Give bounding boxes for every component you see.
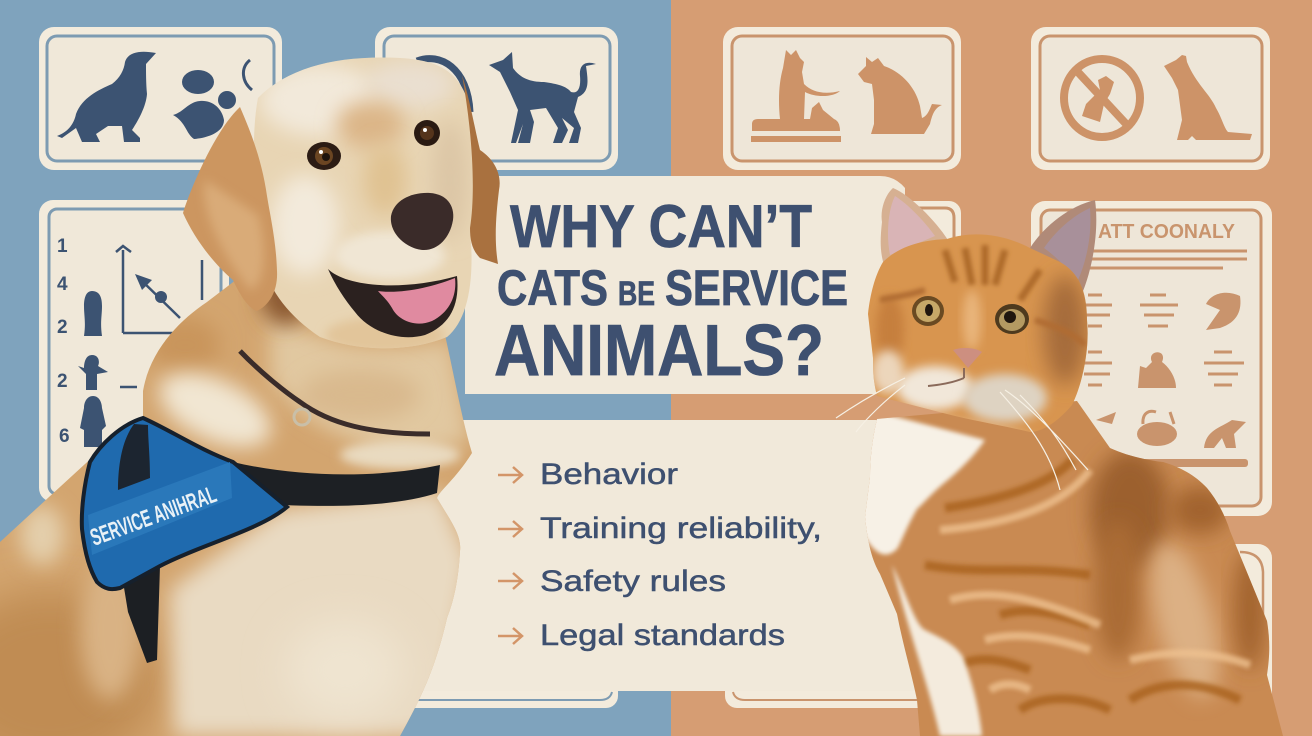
icon: circle arc <box>417 59 470 112</box>
panel: title card <box>465 176 905 394</box>
list item: Safety rules <box>498 565 726 598</box>
heading: panel label: ATT COONALY <box>1098 221 1236 243</box>
background: blue side <box>0 0 671 736</box>
list item: Safety rules: Safety rules <box>540 565 726 598</box>
dog head <box>254 58 473 348</box>
chart: numbered list: 1 <box>57 236 68 257</box>
dog eyes <box>307 120 440 170</box>
cat left ear <box>881 188 948 265</box>
collar ring <box>294 409 310 425</box>
icon: prohibition sign <box>1064 59 1140 137</box>
cat eyes <box>912 296 1029 334</box>
panel: dog icons top left <box>39 27 282 170</box>
title: BE <box>618 275 655 313</box>
cat body <box>850 400 1300 736</box>
list item: Behavior <box>498 458 678 491</box>
chart: numbered list: 4 <box>57 274 68 295</box>
cat whiskers <box>836 378 1088 490</box>
panel: lower right fragment <box>1200 544 1272 736</box>
cat mouth <box>928 368 964 386</box>
chart: numbered list: 2 <box>57 371 68 392</box>
harness strap <box>233 462 440 506</box>
title: WHY CAN’T <box>510 193 812 260</box>
dog tongue <box>378 278 455 324</box>
chart: numbered list: 2 <box>57 317 68 338</box>
dog right ear <box>462 75 500 264</box>
title: SERVICE <box>665 260 848 316</box>
panel: cat infographic right <box>1031 201 1272 516</box>
cat <box>836 188 1300 736</box>
panel: dog icons top middle <box>375 27 618 170</box>
icon: sitting cat <box>1164 55 1252 140</box>
vest label: SERVICE ANIHRAL <box>87 481 220 552</box>
icon: sitting cat <box>858 57 942 134</box>
dog body <box>0 254 480 736</box>
chart: numbered list: 6 <box>59 426 70 447</box>
background: orange side <box>671 0 1312 736</box>
title: CATS <box>497 260 608 316</box>
panel: dog stats left <box>39 200 229 502</box>
icon: cat with paw raised on a stand <box>751 50 841 142</box>
cat right ear <box>1030 200 1096 302</box>
panel: cat icons top left <box>723 27 961 170</box>
vest: service animal <box>82 418 287 589</box>
cat head <box>868 234 1088 432</box>
panel: reasons list card <box>413 420 933 691</box>
icon: people silhouettes <box>78 291 108 447</box>
dog collar <box>240 351 430 434</box>
list item: Legal standards: Legal standards <box>540 619 785 652</box>
dog nose <box>391 193 453 250</box>
text lines and icons <box>1084 251 1247 385</box>
cat nose <box>953 348 982 368</box>
chart: numbered list <box>57 236 70 447</box>
dog <box>0 50 500 736</box>
title <box>494 193 848 391</box>
harness buckle <box>117 540 160 663</box>
icon: dog silhouette <box>57 52 156 142</box>
panel: mid row left lower fragment <box>400 560 618 708</box>
chart: axes and arrow <box>116 246 202 387</box>
icon: blob figures <box>173 60 252 139</box>
list item: Behavior: Behavior <box>540 458 678 491</box>
panel: mid row right fragments <box>725 201 961 708</box>
panel: cat icons top right <box>1031 27 1270 170</box>
dog left ear <box>183 107 277 311</box>
icon cluster <box>1096 293 1246 448</box>
cat white chest <box>860 410 985 555</box>
list item: Training reliability: Training reliability, <box>540 512 822 545</box>
icon: standing dog silhouette <box>489 52 596 143</box>
title: ANIMALS? <box>494 311 824 391</box>
dog mouth <box>328 269 458 337</box>
